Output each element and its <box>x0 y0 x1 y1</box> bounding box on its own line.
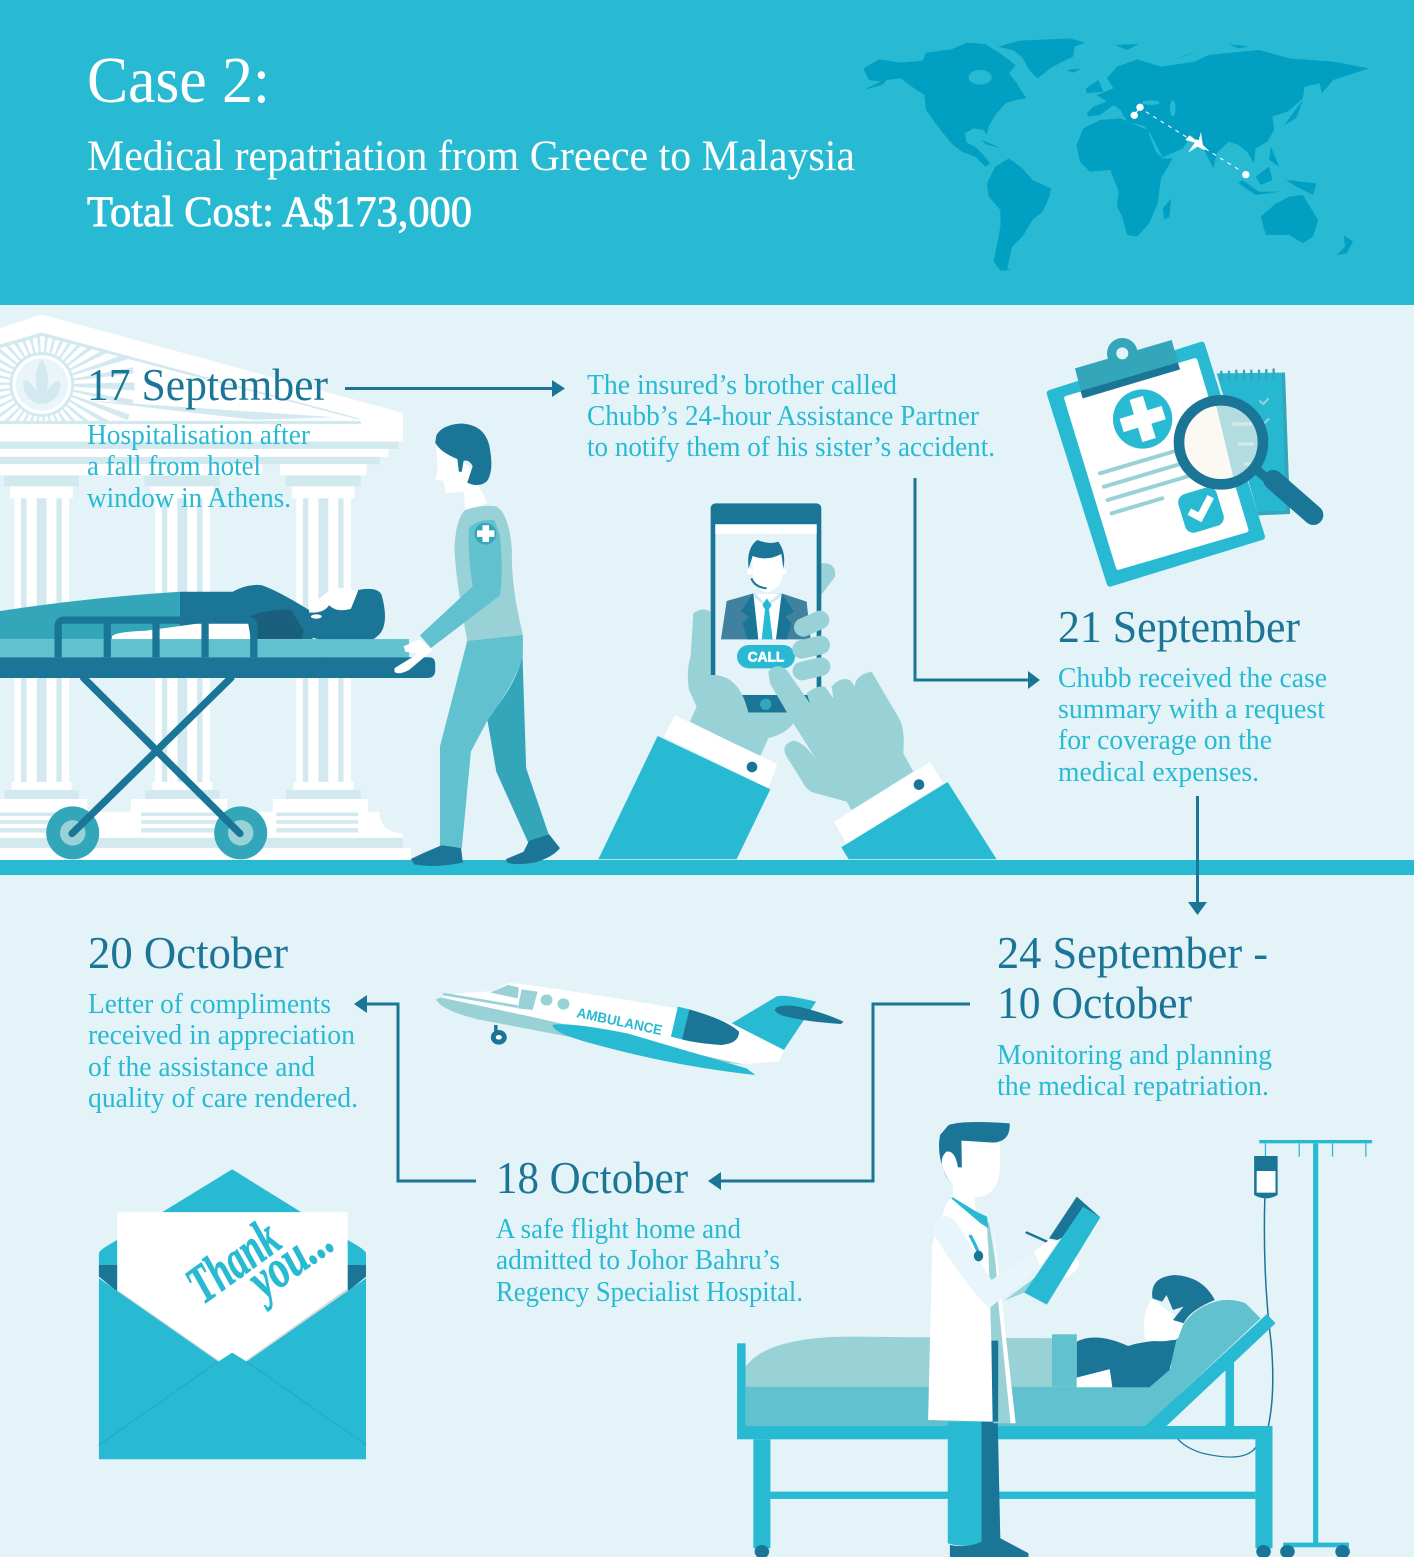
text: letter of compliments: of the assistance and <box>88 1052 315 1083</box>
header band <box>0 0 1414 305</box>
illustration: clipboard and magnifier <box>1050 338 1313 583</box>
illustration: Greek temple <box>0 314 411 860</box>
illustration: phone call with hands <box>598 503 997 859</box>
text: hospitalisation <box>87 420 311 514</box>
heading: 24 September - 10 October: 24 September - <box>997 927 1268 978</box>
arrow: to 18 October <box>708 1002 970 1190</box>
illustration: thank-you envelope <box>99 1169 366 1459</box>
text: hospitalisation: window in Athens. <box>87 483 291 514</box>
text: safe flight <box>496 1214 803 1308</box>
text: safe flight: Regency Specialist Hospital. <box>496 1277 803 1308</box>
illustration: patient on stretcher <box>0 585 435 859</box>
ambulance label: AMBULANCE <box>575 1004 664 1038</box>
heading: 24 September - 10 October <box>997 927 1268 1028</box>
heading: 20 October: 20 October <box>88 927 288 978</box>
title: Case 2: Case 2: <box>87 44 270 117</box>
text: letter of compliments: received in appreciation <box>88 1020 355 1051</box>
illustration: doctor with clipboard <box>928 1122 1100 1557</box>
text: case summary: for coverage on the <box>1058 725 1272 756</box>
text: hospitalisation: Hospitalisation after <box>87 420 311 451</box>
subtitle: Medical repatriation from Greece to Malaysia <box>87 133 855 180</box>
thank you script: you... <box>232 1208 344 1312</box>
agent on screen <box>721 540 811 639</box>
text: brother called: Chubb’s 24-hour Assistance Partner <box>587 401 980 432</box>
text: monitoring: Monitoring and planning <box>997 1040 1272 1071</box>
heading: 24 September - 10 October: 10 October <box>997 977 1192 1028</box>
total cost: Total Cost: A$173,000 <box>87 189 472 236</box>
text: letter of compliments: Letter of compliments <box>88 989 331 1020</box>
text: safe flight: A safe flight home and <box>496 1214 741 1245</box>
text: case summary: summary with a request <box>1058 694 1325 725</box>
text: case summary <box>1058 663 1327 788</box>
text: brother called: The insured’s brother called <box>587 370 897 401</box>
text: hospitalisation: a fall from hotel <box>87 451 261 482</box>
illustration: ambulance plane <box>436 983 844 1075</box>
text: case summary: Chubb received the case <box>1058 663 1327 694</box>
world map with flight route <box>864 38 1369 271</box>
heading: 17 September: 17 September <box>87 359 328 410</box>
ground line <box>0 860 1414 875</box>
arrow: to 20 October <box>354 995 476 1182</box>
call button <box>737 645 795 668</box>
text: brother called <box>587 370 995 463</box>
thank you script: Thank <box>175 1207 291 1315</box>
arrow: to brother call <box>345 380 565 397</box>
text: letter of compliments <box>88 989 358 1114</box>
illustration: patient in hospital bed <box>737 1275 1275 1557</box>
illustration: paramedic pushing stretcher <box>395 423 560 866</box>
text: case summary: medical expenses. <box>1058 757 1259 788</box>
wheels <box>46 806 267 859</box>
text: safe flight: admitted to Johor Bahru’s <box>496 1245 780 1276</box>
text: monitoring: the medical repatriation. <box>997 1071 1269 1102</box>
call button: CALL <box>748 649 785 665</box>
arrow: to 24 September <box>1188 796 1207 915</box>
arrow: to 21 September <box>914 478 1040 689</box>
text: letter of compliments: quality of care rendered. <box>88 1083 358 1114</box>
heading: 18 October: 18 October <box>496 1152 688 1203</box>
illustration: IV stand <box>1177 1140 1372 1557</box>
text: brother called: to notify them of his sister’s accident. <box>587 432 995 463</box>
heading: 21 September: 21 September <box>1058 601 1300 652</box>
text: monitoring <box>997 1040 1272 1102</box>
notepad <box>1217 369 1290 515</box>
